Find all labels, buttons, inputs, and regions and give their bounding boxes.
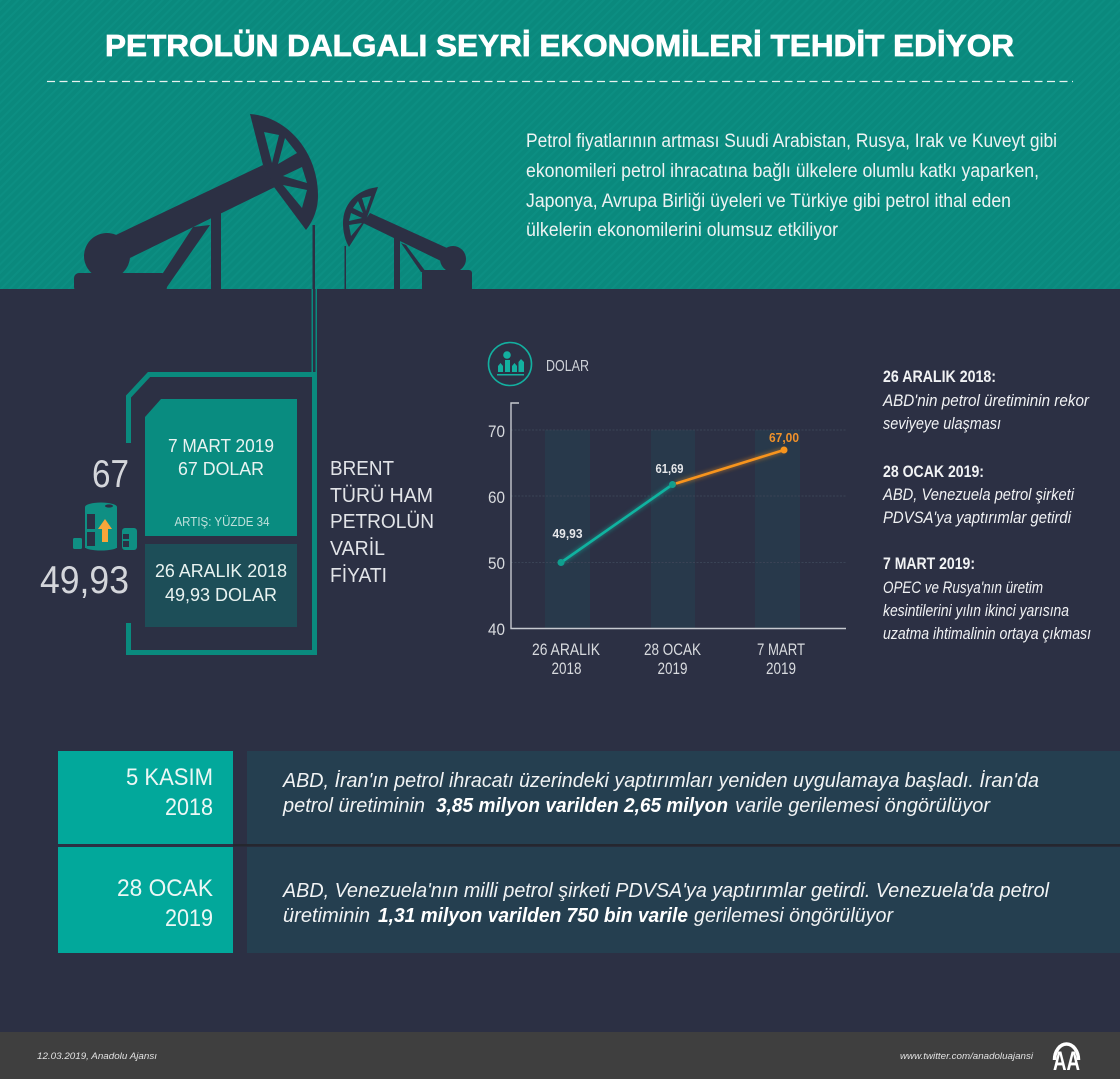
note: 7 March 2019 bbox=[883, 555, 1091, 643]
x axis labels: 2019 bbox=[766, 660, 796, 678]
chart axes bbox=[511, 403, 846, 628]
panel: 7 March 2019 box bbox=[145, 399, 297, 536]
panel: 26 December 2018 box: 26 ARALIK 2018 bbox=[155, 561, 287, 581]
x axis labels: 26 ARALIK bbox=[532, 641, 600, 659]
note: 26 December 2018: ABD'nin petrol üretiminin rekor bbox=[882, 392, 1090, 410]
note: 28 January 2019: PDVSA'ya yaptırımlar getirdi bbox=[883, 509, 1072, 527]
data labels bbox=[552, 430, 799, 541]
note: 28 January 2019: 28 OCAK 2019: bbox=[883, 463, 984, 481]
label: Brent crude barrel price: TÜRÜ HAM bbox=[330, 485, 433, 507]
panel: 7 March 2019 box: 67 DOLAR bbox=[178, 459, 264, 479]
x axis labels: 28 OCAK bbox=[644, 641, 701, 659]
intro text block: Petrol fiyatlarının artması Suudi Arabistan, Rusya, Irak ve Kuveyt gibi bbox=[526, 131, 1057, 152]
teal line series bbox=[558, 481, 676, 566]
note: 28 January 2019 bbox=[882, 463, 1075, 527]
note: 26 December 2018: seviyeye ulaşması bbox=[883, 415, 1001, 433]
y axis labels bbox=[488, 423, 505, 639]
panel: brent price frame bbox=[128, 374, 314, 652]
panel: 28 January 2019: üretiminin bbox=[283, 905, 370, 927]
panel: 7 March 2019 box: 7 MART 2019 bbox=[168, 436, 274, 456]
intro text block: Japonya, Avrupa Birliği üyeleri ve Türkiye gibi petrol ithal eden bbox=[526, 191, 1011, 212]
label: Brent crude barrel price bbox=[330, 458, 434, 587]
note: 7 March 2019: OPEC ve Rusya'nın üretim bbox=[883, 579, 1043, 597]
panel: 28 January 2019 bbox=[58, 847, 1120, 953]
icon: dollar chart circle bbox=[488, 342, 532, 386]
chart columns bbox=[545, 430, 800, 628]
panel: 26 December 2018 box bbox=[145, 544, 297, 627]
panel: 5 November 2018: ABD, İran'ın petrol ihracatı üzerindeki yaptırımları yeniden uygulamaya başladı. İran'da bbox=[282, 770, 1039, 792]
data labels: 49,93 bbox=[552, 526, 582, 541]
data labels: 67,00 bbox=[769, 430, 799, 445]
panel: 5 November 2018 bbox=[58, 751, 1120, 844]
panel: 5 November 2018: 5 KASIM bbox=[126, 764, 213, 791]
footer url: www.twitter.com/anadoluajansi bbox=[900, 1051, 1034, 1062]
x axis labels: 2019 bbox=[658, 660, 688, 678]
y axis labels: 60 bbox=[488, 489, 505, 507]
note: 26 December 2018 bbox=[882, 368, 1090, 433]
pump cable down to frame bbox=[312, 289, 317, 373]
event notes bbox=[882, 368, 1091, 643]
panel: 28 January 2019: ABD, Venezuela'nın milli petrol şirketi PDVSA'ya yaptırımlar getirdi. Venezuela'da petrol bbox=[282, 880, 1050, 902]
panel: 7 March 2019 box: ARTIŞ: YÜZDE 34 bbox=[174, 514, 270, 529]
note: 7 March 2019: 7 MART 2019: bbox=[883, 555, 975, 573]
title: PETROLÜN DALGALI SEYRİ EKONOMİLERİ TEHDİT EDİYOR bbox=[105, 28, 1014, 63]
intro text block: ekonomileri petrol ihracatına bağlı ülkelere olumlu katkı yaparken, bbox=[526, 161, 1039, 182]
line chart bbox=[488, 403, 846, 678]
footer date and source: 12.03.2019, Anadolu Ajansı bbox=[37, 1051, 157, 1062]
y axis labels: 70 bbox=[488, 423, 505, 441]
panel: 26 December 2018 box: 49,93 DOLAR bbox=[165, 585, 277, 605]
x axis labels: 2018 bbox=[552, 660, 582, 678]
x axis labels bbox=[532, 641, 805, 678]
intro text block: ülkelerin ekonomilerini olumsuz etkiliyor bbox=[526, 220, 839, 241]
y axis labels: 50 bbox=[488, 555, 505, 573]
y axis labels: 40 bbox=[488, 621, 505, 639]
label: DOLAR: DOLAR bbox=[546, 358, 589, 375]
icon: AA logo bbox=[1053, 1044, 1080, 1076]
panel: 5 November 2018: petrol üretiminin bbox=[282, 795, 425, 817]
note: 26 December 2018: 26 ARALIK 2018: bbox=[883, 368, 996, 386]
panel: 5 November 2018: 2018 bbox=[165, 794, 213, 821]
footer bar bbox=[0, 1032, 1120, 1079]
panel: 28 January 2019: 1,31 milyon varilden 750 bin varile bbox=[378, 905, 688, 927]
panel: 5 November 2018: 3,85 milyon varilden 2,65 milyon bbox=[436, 795, 728, 817]
value: 49,93: 49,93 bbox=[40, 559, 129, 602]
icon: small pumpjack bbox=[343, 187, 472, 292]
note: 28 January 2019: ABD, Venezuela petrol şirketi bbox=[882, 486, 1075, 504]
note: 7 March 2019: uzatma ihtimalinin ortaya çıkması bbox=[883, 625, 1091, 643]
icon: AA logo: AA bbox=[1053, 1046, 1080, 1076]
panel: 5 November 2018: varile gerilemesi öngörülüyor bbox=[735, 795, 991, 817]
orange line series bbox=[676, 446, 788, 484]
note: 7 March 2019: kesintilerini yılın ikinci yarısına bbox=[883, 602, 1069, 620]
data labels: 61,69 bbox=[656, 461, 684, 476]
value: 67: 67 bbox=[92, 453, 129, 496]
icon: oil barrels with up arrow bbox=[73, 502, 137, 550]
label: Brent crude barrel price: VARİL bbox=[330, 537, 385, 560]
icon: large pumpjack bbox=[74, 114, 318, 292]
label: Brent crude barrel price: BRENT bbox=[330, 458, 394, 480]
background: teal header band bbox=[0, 0, 1120, 289]
label: Brent crude barrel price: FİYATI bbox=[330, 564, 387, 587]
panel: 28 January 2019: 28 OCAK bbox=[117, 875, 213, 902]
panel: 28 January 2019: 2019 bbox=[165, 905, 213, 932]
label: Brent crude barrel price: PETROLÜN bbox=[330, 511, 434, 533]
x axis labels: 7 MART bbox=[757, 641, 805, 659]
intro text block bbox=[526, 131, 1057, 241]
panel: 28 January 2019: gerilemesi öngörülüyor bbox=[694, 905, 894, 927]
